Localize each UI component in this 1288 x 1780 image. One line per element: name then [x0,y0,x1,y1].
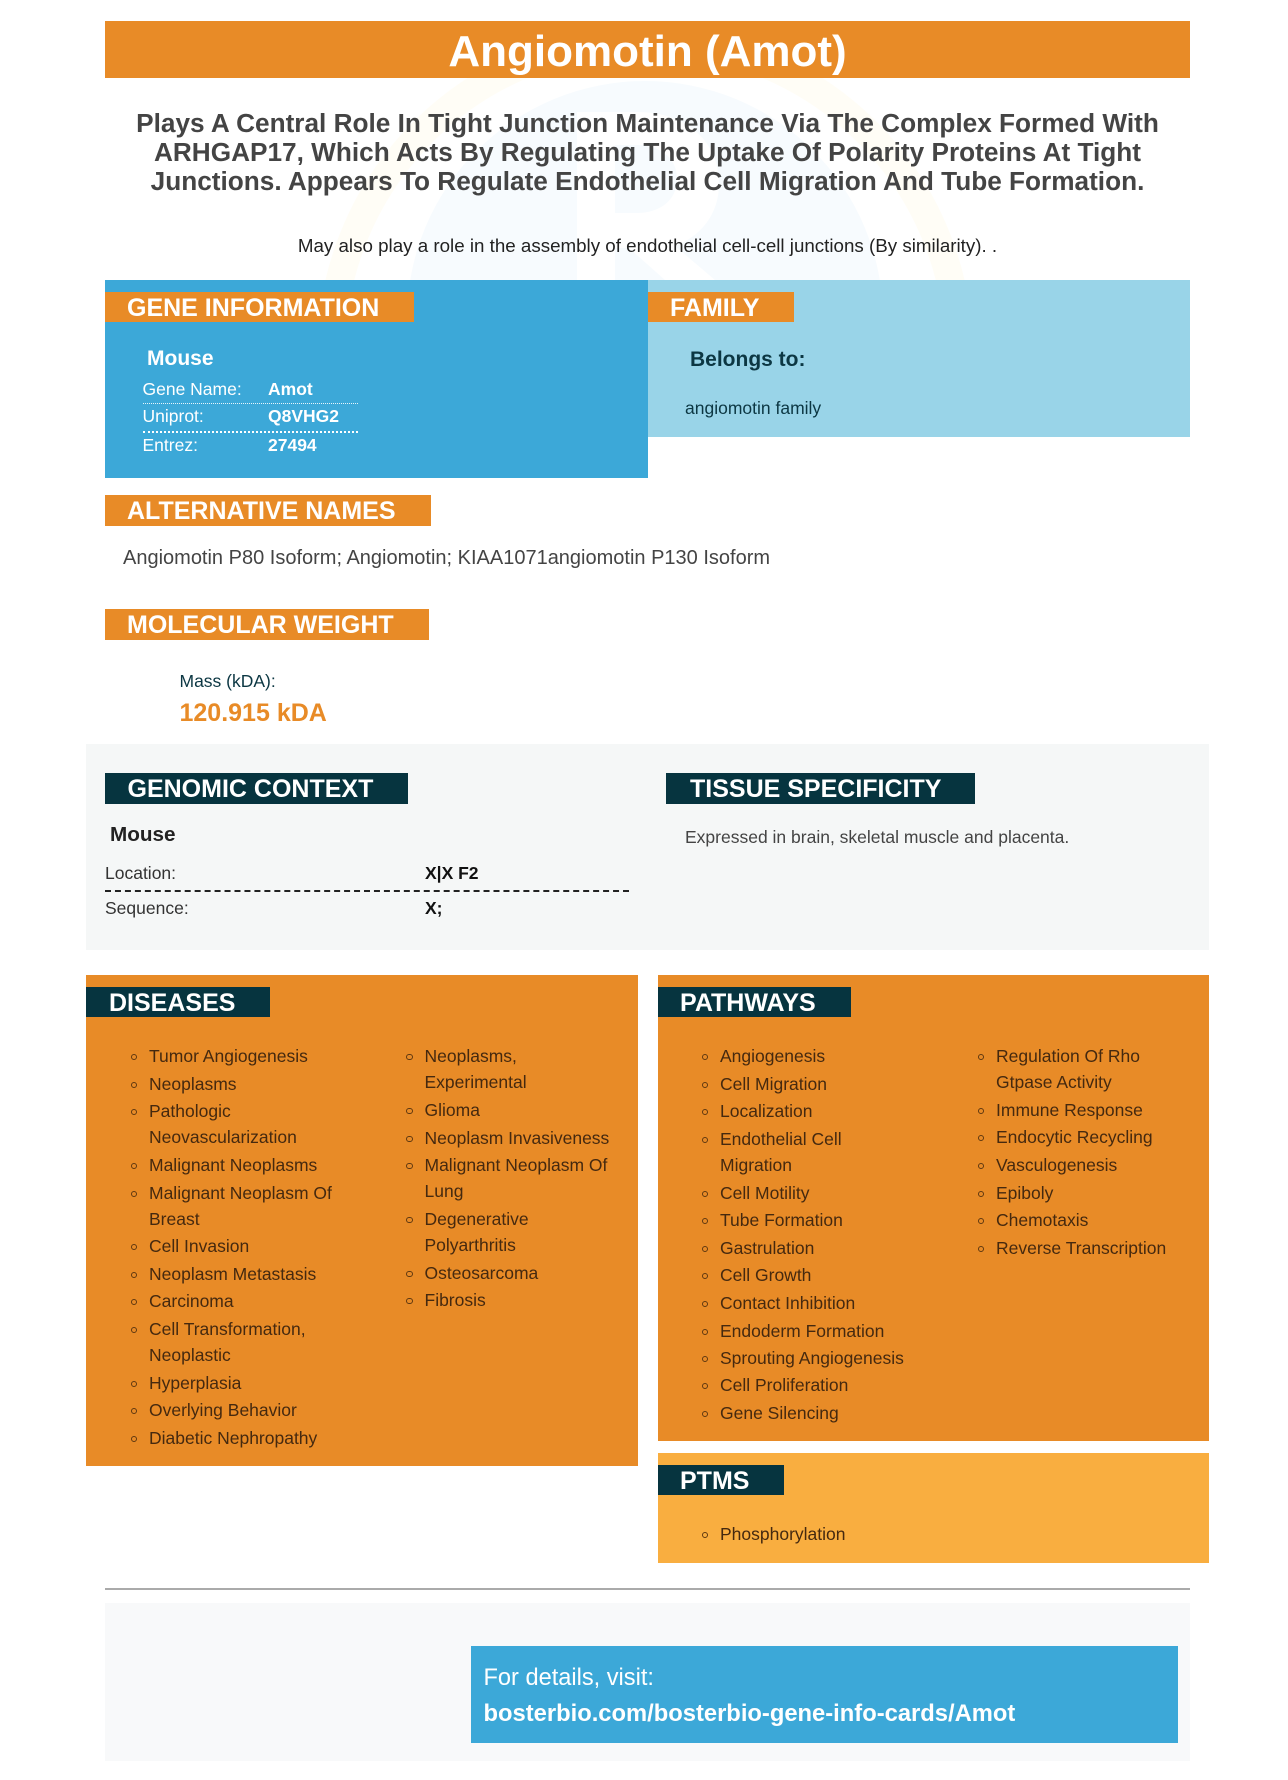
diseases list column 1: Pathologic [149,1101,231,1121]
pathways list column 2: Endocytic Recycling [996,1127,1153,1147]
species label: Mouse [110,823,176,846]
diseases list column 1: Cell Transformation, [149,1319,306,1339]
pathways list column 2 [978,1046,1166,1258]
genomic table: X|X F2 [425,863,479,883]
callout label: For details, visit: [484,1665,654,1691]
diseases list column 1: Neoplastic [149,1345,231,1365]
heading: family [648,292,794,322]
alternative names text: Angiomotin P80 Isoform; Angiomotin; KIAA1071angiomotin P130 Isoform [123,547,770,569]
heading: alternative names: ALTERNATIVE NAMES [127,497,396,525]
gene id table: Gene Name: [142,379,242,399]
gene id table: Uniprot: [142,406,204,426]
callout url: bosterbio.com/bosterbio-gene-info-cards/Amot [484,1700,1015,1727]
heading: gene information: GENE INFORMATION [127,294,379,322]
heading: ptms [658,1465,784,1495]
heading: pathways [658,987,851,1017]
heading: ptms: PTMS [680,1467,749,1495]
pathways list column 2: Immune Response [996,1100,1143,1120]
diseases list column 1: Hyperplasia [149,1373,241,1393]
pathways list column 1: Endoderm Formation [720,1321,884,1341]
callout: details link [471,1646,1178,1743]
molecular weight value [180,671,327,727]
diseases list column 1: Neoplasms [149,1074,237,1094]
diseases list column 2: Degenerative [424,1209,529,1229]
diseases list column 2: Lung [424,1181,463,1201]
summary heading: Junctions. Appears To Regulate Endothelial Cell Migration And Tube Formation. [151,166,1144,196]
pathways list column 1: Endothelial Cell [720,1129,842,1149]
ptms list: Phosphorylation [720,1524,846,1544]
genomic table [105,863,629,918]
pathways list column 1: Migration [720,1155,792,1175]
mass label: Mass (kDA): [180,671,276,691]
diseases list column 2: Fibrosis [424,1290,486,1310]
family label: Belongs to: [690,348,806,371]
panel: pathways [658,975,1209,1441]
diseases list column 1: Neoplasm Metastasis [149,1264,316,1284]
diseases list column 2: Neoplasms, [424,1046,517,1066]
diseases list column 1: Carcinoma [149,1291,234,1311]
pathways list column 1: Angiogenesis [720,1046,825,1066]
mass value: 120.915 kDA [180,699,327,727]
pathways list column 2: Regulation Of Rho [996,1046,1140,1066]
pathways list column 1: Sprouting Angiogenesis [720,1348,904,1368]
pathways list column 2: Epiboly [996,1183,1053,1203]
diseases list column 1: Malignant Neoplasms [149,1155,317,1175]
pathways list column 1: Cell Proliferation [720,1375,848,1395]
heading: diseases [86,987,270,1017]
panel: ptms [658,1453,1209,1563]
heading: pathways: PATHWAYS [680,989,816,1017]
pathways list column 1: Contact Inhibition [720,1293,855,1313]
tissue text: Expressed in brain, skeletal muscle and placenta. [685,827,1069,847]
genomic table: Sequence: [105,898,189,918]
summary heading: Plays A Central Role In Tight Junction Maintenance Via The Complex Formed With [136,108,1159,138]
pathways list column 1: Tube Formation [720,1210,843,1230]
panel: diseases [86,975,638,1466]
panel: genomic context and tissue specificity [86,744,1209,950]
pathways list column 1: Cell Growth [720,1265,811,1285]
diseases list column 2: Experimental [424,1072,527,1092]
diseases list column 1: Diabetic Nephropathy [149,1428,317,1448]
diseases list column 2: Polyarthritis [424,1235,516,1255]
diseases list column 2: Glioma [424,1100,480,1120]
panel: family [648,280,1190,437]
gene id table: 27494 [268,435,317,455]
diseases list column 1: Overlying Behavior [149,1400,297,1420]
diseases list column 2 [406,1046,609,1310]
panel: gene information [105,280,648,478]
heading: family: FAMILY [670,294,759,322]
diseases list column 1: Neovascularization [149,1127,297,1147]
pathways list column 2: Vasculogenesis [996,1155,1117,1175]
heading: molecular weight: MOLECULAR WEIGHT [127,611,394,639]
gene id table: Amot [268,379,313,399]
panel: footer [105,1603,1190,1761]
diseases list column 2: Neoplasm Invasiveness [424,1128,609,1148]
title banner [105,21,1190,78]
gene id table [142,379,358,455]
diseases list column 1: Cell Invasion [149,1236,249,1256]
heading: tissue specificity: TISSUE SPECIFICITY [690,775,941,803]
summary heading: ARHGAP17, Which Acts By Regulating The Uptake Of Polarity Proteins At Tight [154,137,1141,167]
title banner: Angiomotin (Amot) [448,27,847,76]
diseases list column 2: Malignant Neoplasm Of [424,1155,607,1175]
diseases list column 1: Malignant Neoplasm Of [149,1183,332,1203]
pathways list column 1: Gastrulation [720,1238,814,1258]
pathways list column 1: Gene Silencing [720,1403,839,1423]
genomic table: Location: [105,863,176,883]
gene id table: Q8VHG2 [268,406,339,426]
pathways list column 2: Chemotaxis [996,1210,1088,1230]
pathways list column 2: Gtpase Activity [996,1072,1112,1092]
family value: angiomotin family [685,398,821,418]
pathways list column 2: Reverse Transcription [996,1238,1166,1258]
diseases list column 1: Breast [149,1209,200,1229]
pathways list column 1: Localization [720,1101,812,1121]
pathways list column 1 [702,1046,904,1423]
diseases list column 1 [131,1046,332,1448]
diseases list column 2: Osteosarcoma [424,1263,538,1283]
pathways list column 1: Cell Migration [720,1074,827,1094]
summary note: May also play a role in the assembly of endothelial cell-cell junctions (By similarity). . [298,235,997,256]
gene id table: Entrez: [142,435,198,455]
heading: diseases: DISEASES [109,989,235,1017]
genomic table: X; [425,898,442,918]
heading: genomic context: GENOMIC CONTEXT [128,775,373,803]
species label: Mouse [147,347,214,370]
diseases list column 1: Tumor Angiogenesis [149,1046,308,1066]
summary heading [136,108,1159,196]
pathways list column 1: Cell Motility [720,1183,809,1203]
watermark logo [326,78,964,280]
